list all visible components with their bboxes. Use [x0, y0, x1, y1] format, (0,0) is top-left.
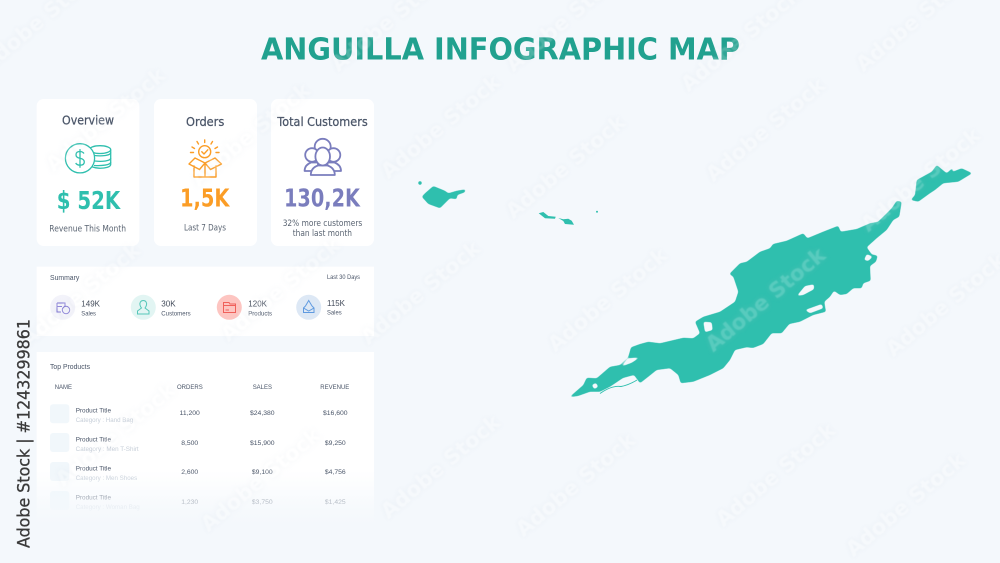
title: ANGUILLA INFOGRAPHIC MAP	[261, 32, 740, 68]
table row: men t-shirt	[50, 433, 346, 453]
map: anguilla	[418, 165, 972, 397]
map: main island	[569, 201, 902, 397]
caption: last 7 days: Last 7 Days	[184, 223, 226, 233]
heading: overview: Overview	[62, 113, 114, 128]
stat: sales	[50, 295, 100, 320]
icon: customers group	[305, 139, 341, 175]
heading: total customers: Total Customers	[276, 114, 368, 129]
watermark pattern: Adobe Stock	[196, 422, 326, 536]
stat: customers	[131, 295, 191, 320]
table row: woman bag: Product Title	[76, 495, 111, 502]
watermark pattern: Adobe Stock	[51, 377, 181, 491]
watermark pattern: Adobe Stock	[856, 122, 986, 236]
watermark pattern: Adobe Stock	[701, 242, 831, 356]
table row: men shoes: $9,100	[252, 469, 273, 476]
watermark pattern: Adobe Stock	[356, 235, 486, 349]
stat: sales secondary: 115K	[327, 298, 345, 308]
map: dog island	[422, 186, 466, 208]
panel: total customers card	[271, 99, 374, 246]
stat: products: 120K	[248, 299, 267, 309]
heading: orders: Orders	[186, 114, 224, 129]
table header: ORDERS	[177, 385, 203, 391]
table row: woman bag	[50, 491, 346, 511]
table row: men t-shirt: $9,250	[325, 440, 346, 447]
table row: men shoes	[50, 462, 346, 482]
stat: customers: Customers	[161, 312, 191, 318]
caption: more customers: 32% more customers	[283, 219, 363, 229]
heading: top products: Top Products	[50, 362, 90, 371]
metric: 52K: $ 52K	[57, 186, 121, 215]
table row: men t-shirt: $15,900	[250, 440, 275, 447]
map: islet near dog island	[418, 181, 422, 185]
table row: woman bag: Category : Woman Bag	[76, 504, 140, 511]
table row: men shoes: Category : Men Shoes	[76, 475, 137, 482]
table row: men t-shirt: 8,500	[181, 440, 198, 447]
stock id label: Adobe Stock | #1243299861	[14, 319, 34, 548]
map: prickly pear west	[539, 212, 556, 219]
heading: summary: Summary	[50, 273, 80, 282]
stat: customers: 30K	[161, 299, 176, 309]
watermark pattern: Adobe Stock	[841, 447, 971, 561]
watermark pattern: Adobe Stock	[41, 62, 171, 176]
table row: hand bag: $24,380	[250, 410, 275, 417]
stat: products: Products	[248, 312, 272, 318]
map: southwest lagoon strip	[600, 380, 637, 394]
map: prickly pear east	[558, 218, 574, 225]
watermark pattern: Adobe Stock	[701, 72, 831, 186]
table row: hand bag: $16,600	[323, 410, 348, 417]
caption: revenue: Revenue This Month	[49, 224, 126, 234]
watermark pattern: Adobe Stock	[501, 109, 631, 223]
stat: sales: Sales	[81, 312, 96, 318]
watermark pattern: Adobe Stock	[216, 232, 346, 346]
table row: hand bag: Product Title	[76, 408, 111, 415]
label: last 30 days: Last 30 Days	[327, 275, 360, 281]
watermark pattern: Adobe Stock	[543, 242, 673, 356]
table row: woman bag: $3,750	[252, 499, 273, 506]
table row: men t-shirt: Category : Men T-Shirt	[76, 446, 139, 453]
metric: 1,5K: 1,5K	[180, 184, 230, 213]
table row: hand bag: 11,200	[180, 410, 200, 417]
table row: men shoes: Product Title	[76, 465, 111, 472]
stat: sales secondary: Sales	[327, 310, 342, 316]
table header: NAME	[55, 385, 72, 391]
table row: hand bag: Category : Hand Bag	[76, 417, 134, 424]
watermark pattern: Adobe Stock	[711, 417, 841, 531]
icon: box with check	[189, 140, 222, 177]
table row: hand bag	[50, 404, 348, 424]
caption: than last month: than last month	[293, 229, 352, 239]
watermark pattern: Adobe Stock	[511, 427, 641, 541]
table header: REVENUE	[320, 385, 349, 391]
watermark pattern: Adobe Stock	[186, 77, 316, 191]
stat: sales secondary	[296, 295, 345, 320]
watermark pattern: Adobe Stock	[16, 237, 146, 351]
panel: top products table	[36, 352, 375, 526]
map: scrub island	[911, 165, 972, 202]
metric: 130,2K: 130,2K	[284, 184, 361, 213]
table header	[55, 385, 349, 391]
table row: men shoes: 2,600	[181, 469, 198, 476]
stat: products	[217, 295, 272, 320]
icon: dollar coins	[65, 144, 111, 173]
table row: woman bag: 1,230	[181, 499, 198, 506]
panel: summary	[37, 267, 374, 336]
table row: men shoes: $4,756	[325, 469, 346, 476]
table row: men t-shirt: Product Title	[76, 437, 111, 444]
table row: woman bag: $1,425	[325, 499, 346, 506]
watermark pattern: Adobe Stock	[376, 409, 506, 523]
map: tiny islet	[596, 211, 598, 213]
panel: orders card	[154, 99, 257, 246]
watermark pattern: Adobe Stock	[376, 69, 506, 183]
panel: overview card	[37, 99, 139, 246]
table header: SALES	[253, 385, 272, 391]
stat: sales: 149K	[81, 299, 100, 309]
